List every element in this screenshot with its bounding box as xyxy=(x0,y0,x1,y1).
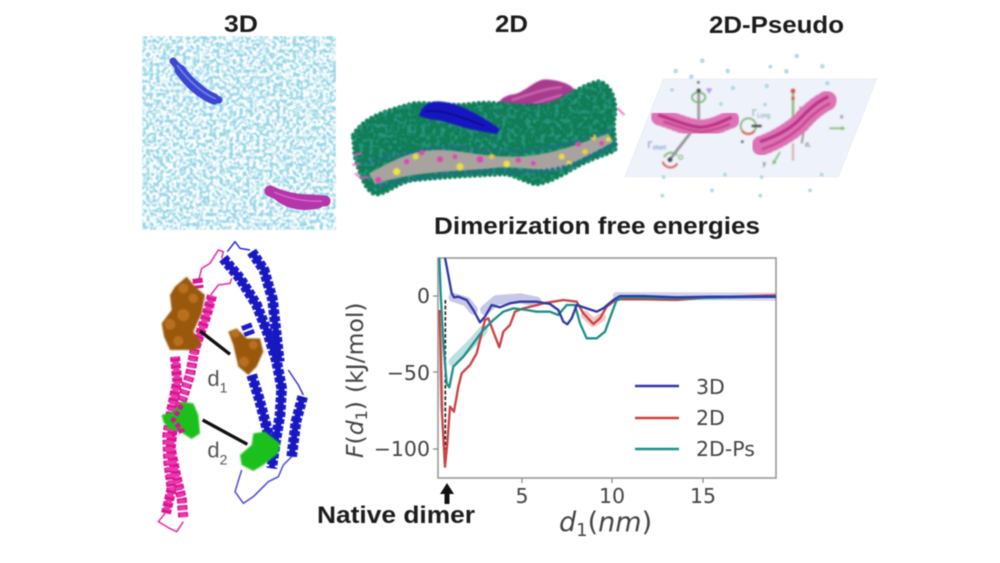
green residues xyxy=(162,402,280,471)
y tick labels xyxy=(374,284,430,461)
dashed native marker xyxy=(444,299,447,450)
label: native dimer: Native dimer xyxy=(317,502,475,529)
x axis label: nm) xyxy=(598,507,652,538)
left axes and rotation marks: Γ xyxy=(648,140,653,150)
protein: blue on membrane xyxy=(419,101,500,134)
right axes: d₁ xyxy=(805,142,811,149)
axis ticks xyxy=(433,296,703,483)
right pseudo protein xyxy=(760,97,830,149)
curve: 2D xyxy=(439,295,776,467)
thin loops xyxy=(158,242,303,532)
right axes: y xyxy=(763,161,767,168)
lipid tails band xyxy=(369,133,613,184)
magenta strand over green xyxy=(172,405,182,435)
left axes and rotation marks: Long xyxy=(757,113,770,119)
right axes: x xyxy=(840,114,844,121)
legend xyxy=(635,375,755,461)
panel: 2D pseudo schematic xyxy=(625,54,877,198)
curve: 3D xyxy=(445,258,776,324)
curve: 2D-Ps xyxy=(439,258,776,387)
label d1: d xyxy=(207,366,220,391)
y axis label: ) xyxy=(341,401,369,410)
protein: blue in water xyxy=(173,61,219,100)
chart: free energy curves xyxy=(341,258,776,541)
d2 distance line xyxy=(203,420,247,444)
arrow: native dimer xyxy=(440,483,454,504)
panel: 2D membrane with proteins xyxy=(352,79,624,194)
title: 2D-Pseudo: 2D-Pseudo xyxy=(709,12,844,39)
y axis label: (kJ/mol) xyxy=(341,302,369,393)
lipid head speckles xyxy=(352,108,624,187)
protein: magenta on membrane xyxy=(497,79,575,110)
label d1: 1 xyxy=(220,380,228,396)
panel: 3D water box with two proteins xyxy=(142,36,336,230)
water box xyxy=(142,36,336,230)
uncertainty bands xyxy=(440,296,776,410)
x axis label: d xyxy=(559,507,577,538)
y tick labels: −100 xyxy=(374,437,430,461)
x tick labels: 5 xyxy=(515,484,529,508)
label d2: d xyxy=(207,438,220,463)
panel: dimer protein structure xyxy=(158,242,303,532)
x axis label: 1 xyxy=(576,520,588,541)
x tick labels: 10 xyxy=(599,484,625,508)
x axis label: ( xyxy=(588,507,598,538)
y tick labels: 0 xyxy=(417,284,430,308)
chart heading: Dimerization free energies xyxy=(434,213,760,240)
protein: magenta in water xyxy=(270,191,325,204)
y axis label: 1 xyxy=(352,410,371,420)
pseudo plane xyxy=(625,79,877,177)
left axes and rotation marks xyxy=(648,81,770,167)
curves xyxy=(439,258,776,467)
left axes and rotation marks: Γ xyxy=(752,108,757,118)
scattered water dots xyxy=(660,54,830,198)
blue helices xyxy=(223,252,303,468)
y tick labels: −50 xyxy=(387,361,430,385)
d1 distance line xyxy=(200,331,230,354)
x tick labels xyxy=(515,484,716,508)
title: 2D: 2D xyxy=(495,11,528,38)
membrane body xyxy=(353,82,615,194)
y axis label: F(d xyxy=(341,420,369,458)
brown residues xyxy=(162,277,263,375)
legend: 3D: 3D xyxy=(696,375,725,399)
title: 3D: 3D xyxy=(224,11,258,38)
plot frame xyxy=(438,258,776,478)
label d2: 2 xyxy=(220,451,228,467)
x tick labels: 15 xyxy=(690,484,716,508)
left axes and rotation marks: short xyxy=(653,145,666,151)
right axes xyxy=(763,89,845,168)
legend: 2D-Ps: 2D-Ps xyxy=(696,437,755,461)
left pseudo protein xyxy=(658,115,732,132)
legend: 2D: 2D xyxy=(696,406,725,430)
magenta helices xyxy=(166,278,212,518)
